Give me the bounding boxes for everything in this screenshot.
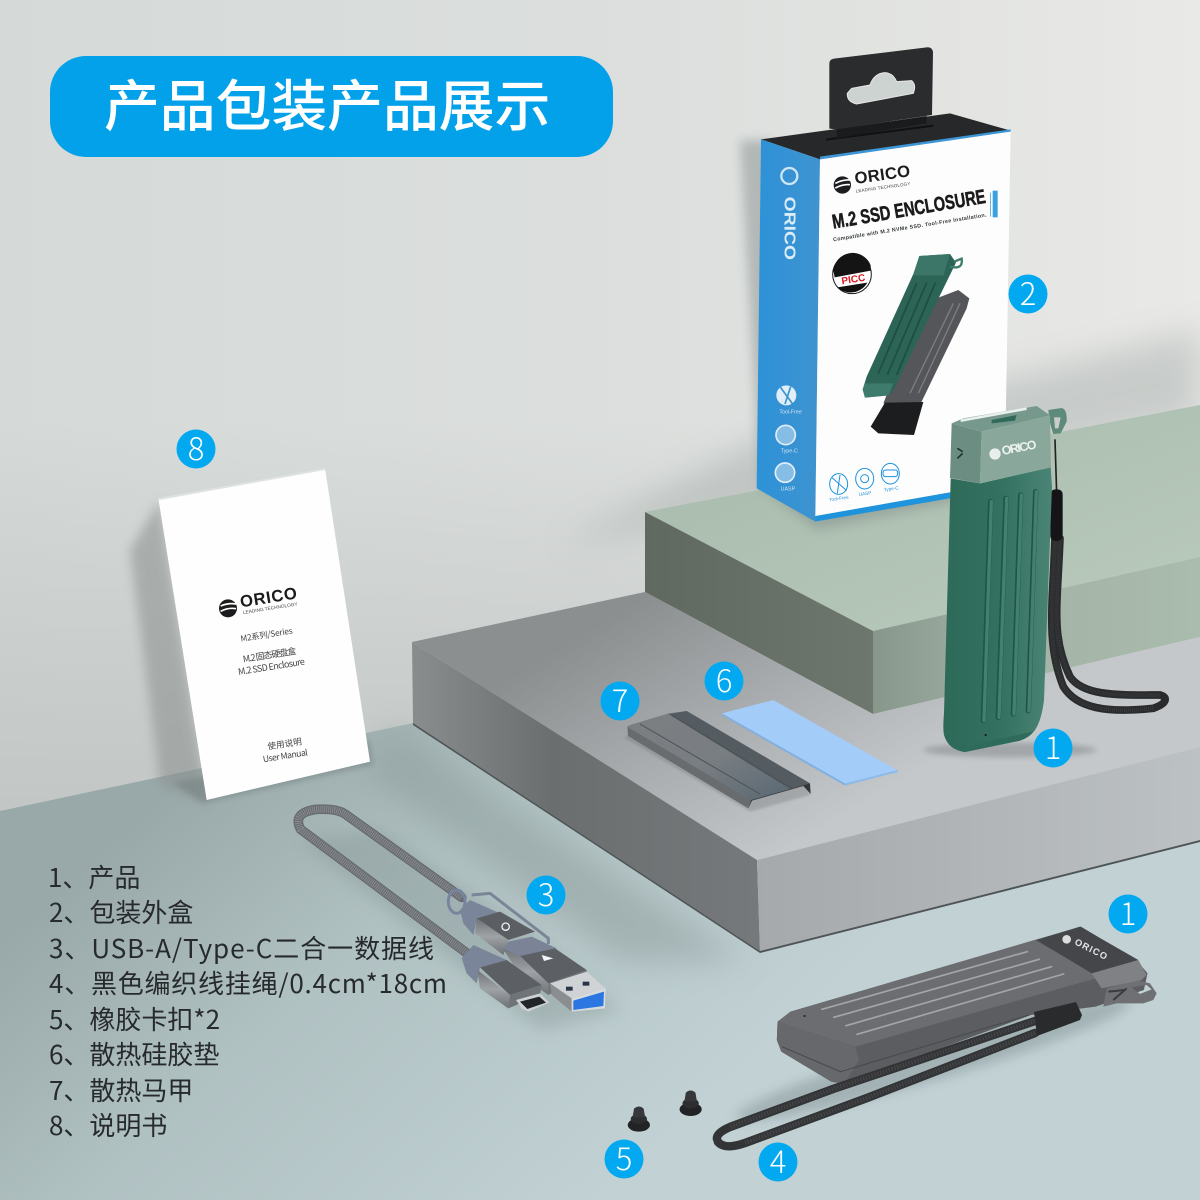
strap clip xyxy=(1034,1002,1082,1036)
enclosure cap xyxy=(950,406,1051,483)
badge 8: 8 xyxy=(188,424,204,469)
badge 3: 3 xyxy=(538,870,554,915)
icon: standing green enclosure with strap xyxy=(923,406,1165,757)
parts list: 3、USB-A/Type-C二合一数据线 xyxy=(49,929,434,966)
badge 7 xyxy=(600,676,640,721)
manual text: series: M2系列/Series xyxy=(240,625,294,645)
parts list: 7、散热马甲 xyxy=(49,1071,193,1108)
title banner: 产品包装产品展示 xyxy=(104,62,550,143)
icon: rubber clip 2 xyxy=(628,1106,650,1132)
box heading: M.2 SSD ENCLOSURE xyxy=(830,186,987,234)
badge 5 xyxy=(604,1134,644,1179)
icon: rubber clip 1 xyxy=(680,1090,702,1116)
green upper step xyxy=(560,330,1200,714)
box white front panel: Type-C xyxy=(883,485,900,492)
badge 4 xyxy=(758,1137,798,1182)
icon: PICC badge: PICC xyxy=(841,273,866,287)
model tag xyxy=(990,191,998,217)
parts list: 8、说明书 xyxy=(49,1106,167,1143)
manual text: product name: M.2 固态硬盘盒 xyxy=(242,644,297,665)
cable shadow xyxy=(300,830,620,1030)
badge 2: 2 xyxy=(1020,269,1036,314)
parts list: 2、包装外盒 xyxy=(49,893,193,930)
parts list: 5、橡胶卡扣*2 xyxy=(49,1000,220,1037)
icon: ORICO logo xyxy=(834,161,911,194)
manual text: product name: M.2 SSD Enclosure xyxy=(237,655,306,678)
badge 3 xyxy=(526,870,566,915)
badge 1: 1 xyxy=(1045,723,1061,768)
icon: heat sink jacket xyxy=(623,711,811,812)
badge 2 xyxy=(1008,269,1048,314)
badge 5: 5 xyxy=(616,1134,632,1179)
enclosure shell xyxy=(729,927,1148,1137)
box bottom feature icons xyxy=(830,463,899,494)
badge 6 xyxy=(704,656,744,701)
parts list: 1、产品 xyxy=(48,858,140,895)
icon: user manual booklet xyxy=(130,468,373,803)
icon: thermal silicone pad xyxy=(722,700,898,786)
manual logo xyxy=(219,584,298,617)
manual text: user manual: 使用说明 xyxy=(267,735,303,753)
manual logo: ORICO xyxy=(239,584,298,611)
box blue side panel: Type-C xyxy=(781,449,798,455)
cooling ribs xyxy=(983,492,1036,721)
badge 8 xyxy=(176,424,216,469)
title banner xyxy=(50,56,613,157)
box blue side panel: UASP xyxy=(781,487,796,493)
badge 1 xyxy=(1034,723,1072,768)
manual text: user manual: User Manual xyxy=(262,746,309,765)
strap xyxy=(717,1021,1035,1146)
parts list: 4、黑色编织线挂绳/0.4cm*18cm xyxy=(49,964,447,1001)
product image on box: green enclosure xyxy=(863,254,962,398)
badge 1 lower: 1 xyxy=(1120,889,1136,934)
box blue side panel: ORICO xyxy=(780,197,797,260)
connectors xyxy=(448,890,606,1012)
badge 7: 7 xyxy=(612,676,628,721)
box white front panel: UASP xyxy=(858,490,872,497)
box white front panel: Tool-Free xyxy=(829,495,849,502)
badge 4: 4 xyxy=(770,1137,786,1182)
braided cable xyxy=(298,809,469,955)
icon: ORICO logo: LEADING TECHNOLOGY xyxy=(855,181,911,194)
box blue side panel: Tool-Free xyxy=(779,409,802,415)
icon: PICC badge xyxy=(833,253,871,294)
product image on box: grey enclosure xyxy=(871,290,969,435)
box white front panel xyxy=(815,129,1011,522)
enclosure body xyxy=(943,467,1052,752)
manual text: product name xyxy=(237,644,306,678)
parts list xyxy=(48,858,447,1143)
enclosure cap: ORICO xyxy=(1001,437,1038,458)
badge 6: 6 xyxy=(716,656,732,701)
badge 1 lower xyxy=(1108,889,1148,934)
box top and hang tab xyxy=(761,47,1011,159)
icon: retail package box xyxy=(740,47,1011,530)
box blue side panel xyxy=(757,139,820,522)
grey lower step xyxy=(412,592,1200,953)
parts list: 6、散热硅胶垫 xyxy=(49,1035,219,1072)
icon: USB-A / Type-C data cable xyxy=(298,809,620,1030)
manual text: user manual xyxy=(262,735,309,765)
enclosure end cap and metal ring xyxy=(1037,927,1157,1007)
box subheading: Compatible with M.2 NVMe SSD. Tool-Free Installation. xyxy=(833,212,987,243)
icon: ORICO logo: ORICO xyxy=(853,161,911,188)
strap clip xyxy=(1050,489,1063,541)
icon: grey enclosure lying flat with strap xyxy=(717,927,1157,1146)
enclosure end cap and metal ring: ORICO xyxy=(1073,937,1109,962)
manual logo: LEADING TECHNOLOGY xyxy=(243,601,298,615)
strap xyxy=(1052,440,1165,710)
hanging ring xyxy=(1048,408,1067,434)
